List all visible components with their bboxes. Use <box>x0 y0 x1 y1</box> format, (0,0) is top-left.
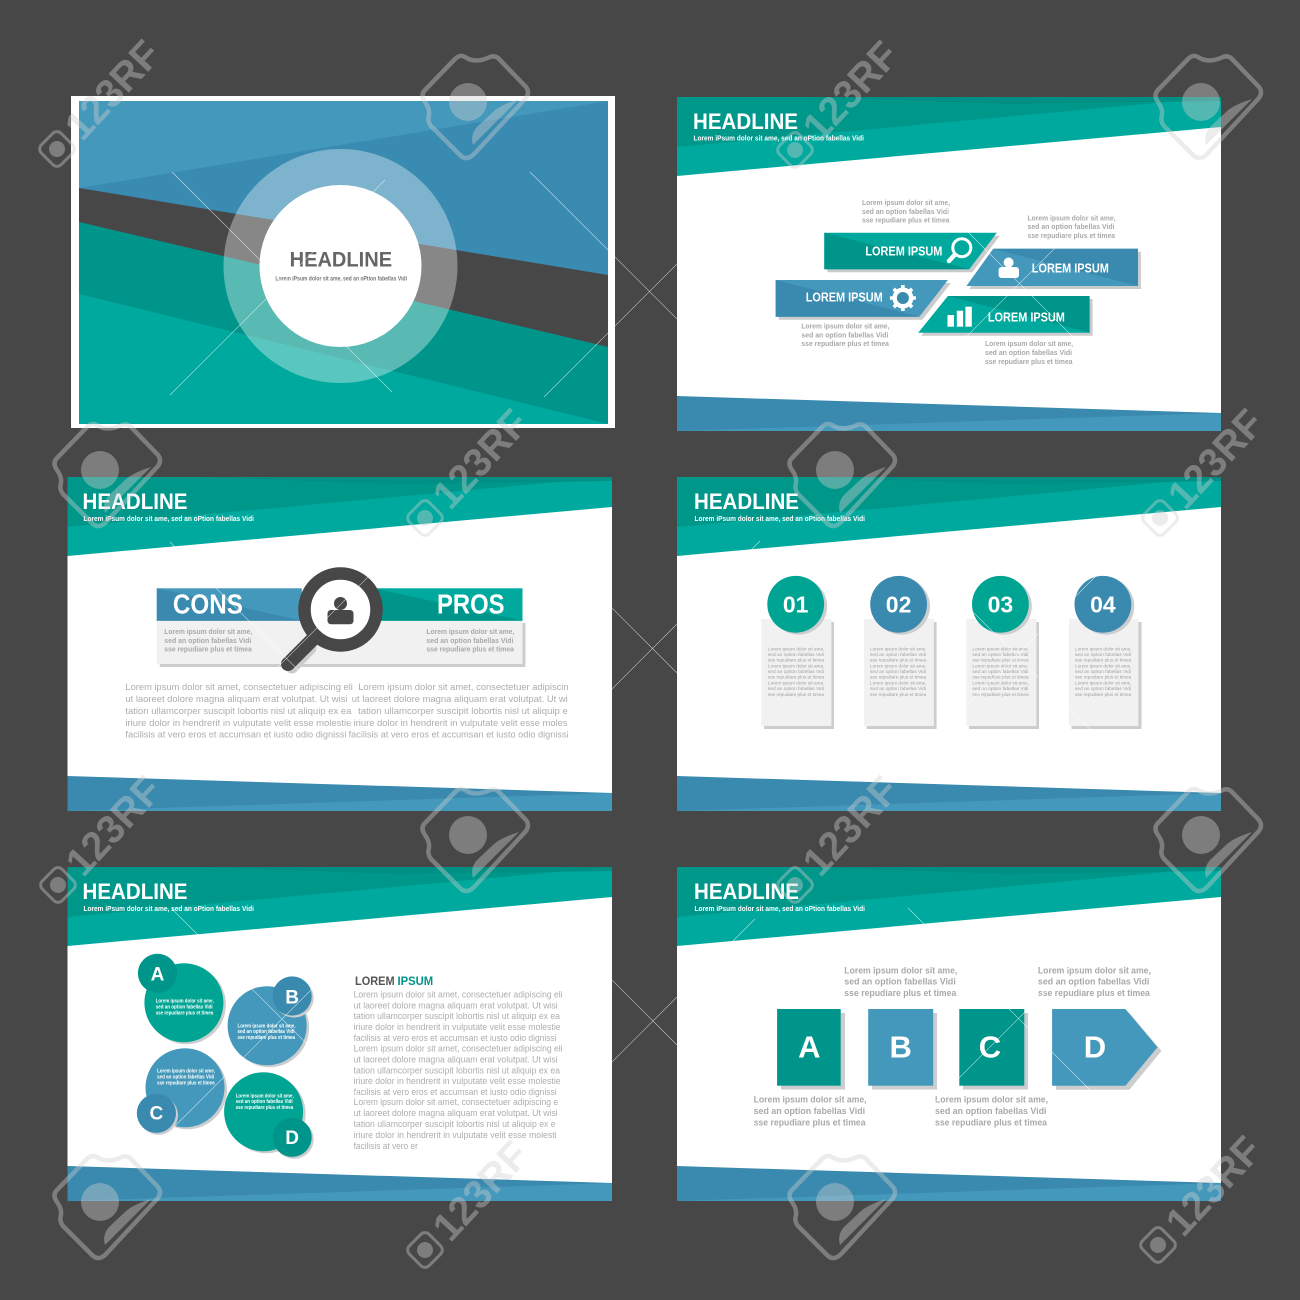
cover headline: HEADLINE <box>290 249 392 272</box>
card 01: sed an option fabellas Vidi <box>768 669 824 674</box>
text block: two column lorem: ut laoreet dolore magna aliquam erat volutpat. Ut wisi <box>125 694 347 705</box>
panel: slide 2 tabs: Lorem iPsum dolor sit ame, sed an oPtion fabellas Vidi <box>694 136 864 143</box>
card 02: Lorem ipsum dolor sit ame, <box>870 663 927 668</box>
text block: two column lorem: facilisis at vero eros et accumsan et iusto odio dignissi <box>125 730 346 741</box>
card 02: sed an option fabellas Vidi <box>870 669 926 674</box>
card 02: sse repudiare plus et timea <box>870 692 927 697</box>
card 01: sed an option fabellas Vidi <box>768 652 824 657</box>
text block: right paragraph: Lorem ipsum dolor sit amet, consectetuer adipiscing eli <box>354 1043 563 1054</box>
card 04: Lorem ipsum dolor sit ame, <box>1075 663 1132 668</box>
pros caption: sse repudiare plus et timea <box>426 647 514 654</box>
cons caption: sse repudiare plus et timea <box>164 647 252 654</box>
circle D: sse repudiare plus et timea <box>236 1105 294 1111</box>
subheading: lorem ipsum: IPSUM <box>398 974 433 988</box>
text block: right paragraph: ut laoreet dolore magna aliquam erat volutpat. Ut wisi <box>354 1054 558 1065</box>
caption: tab 3 <box>801 324 889 348</box>
text block: right paragraph: facilisis at vero eros et accumsan et iusto odio dignissi <box>354 1087 557 1098</box>
card 01: sse repudiare plus et timea <box>768 658 825 663</box>
watermark: 123RF text: 123RF <box>1160 401 1272 518</box>
icon: gear <box>890 285 916 311</box>
caption: top right <box>1038 965 1151 998</box>
text block: right paragraph: ut laoreet dolore magna aliquam erat volutpat. Ut wisi <box>354 1108 558 1119</box>
text block: right paragraph: facilisis at vero er <box>354 1141 418 1152</box>
caption: tab 4: sse repudiare plus et timea <box>985 359 1073 366</box>
caption: bottom middle: sse repudiare plus et timea <box>935 1117 1048 1127</box>
pros caption: Lorem ipsum dolor sit ame, <box>426 629 514 636</box>
caption: bottom left: sse repudiare plus et timea <box>754 1117 867 1127</box>
card 03: sse repudiare plus et timea <box>972 692 1029 697</box>
text block: right paragraph: iriure dolor in hendrerit in vulputate velit esse molestie <box>354 1022 561 1033</box>
text block: right paragraph: iriure dolor in hendrerit in vulputate velit esse molestie <box>354 1076 561 1087</box>
card 03: sse repudiare plus et timea <box>972 658 1029 663</box>
card 04: Lorem ipsum dolor sit ame, <box>1075 646 1132 651</box>
tab: blue person <box>966 249 1141 289</box>
circle B: Lorem ipsum dolor sit ame, <box>238 1023 296 1029</box>
step A <box>777 1009 845 1090</box>
watermark: 123RF text: 123RF <box>425 1133 537 1250</box>
panel: slide 6 process: HEADLINE <box>694 879 799 904</box>
card 04: sse repudiare plus et timea <box>1075 692 1132 697</box>
text block: right paragraph: facilisis at vero eros et accumsan et iusto odio dignissi <box>354 1033 557 1044</box>
circle A: A <box>151 965 165 986</box>
caption: tab 1: sse repudiare plus et timea <box>862 218 950 225</box>
circle D: Lorem ipsum dolor sit ame, <box>236 1093 294 1099</box>
card 03: sed an option fabellas Vidi <box>972 652 1028 657</box>
panel: slide 2 tabs <box>677 97 1221 431</box>
panel: slide 3 cons and pros <box>68 477 612 811</box>
circle B: sse repudiare plus et timea <box>238 1035 296 1041</box>
card 04: sed an option fabellas Vidi <box>1075 686 1131 691</box>
panel: slide 6 process: Lorem iPsum dolor sit ame, sed an oPtion fabellas Vidi <box>694 906 865 913</box>
card 01: sse repudiare plus et timea <box>768 692 825 697</box>
text block: two column lorem: iriure dolor in hendrerit in vulputate velit esse molestie <box>125 718 351 729</box>
text block: two column lorem: facilisis at vero eros et accumsan et iusto odio dignissi <box>349 730 569 741</box>
card 03: 03 <box>988 592 1013 618</box>
text block: two column lorem: ut laoreet dolore magna aliquam erat volutpat. Ut wi <box>352 694 568 705</box>
caption: bottom middle: sed an option fabellas Vidi <box>935 1106 1046 1116</box>
circle C: sed an option fabellas Vidi <box>157 1074 214 1080</box>
cons and pros card <box>157 588 526 667</box>
pros caption <box>426 629 514 654</box>
caption: bottom middle <box>935 1095 1048 1127</box>
card 03: sse repudiare plus et timea <box>972 675 1029 680</box>
card 01: Lorem ipsum dolor sit ame, <box>768 646 824 651</box>
text block: right paragraph: tation ullamcorper suscipit lobortis nisl ut aliquip ex ea <box>354 1011 561 1022</box>
step C <box>959 1009 1028 1090</box>
cons caption <box>164 629 252 654</box>
caption: top left: sed an option fabellas Vidi <box>844 977 956 987</box>
card 02: Lorem ipsum dolor sit ame, <box>870 680 927 685</box>
text block: two column lorem: tation ullamcorper suscipit lobortis nisl ut aliquip ex ea <box>125 706 352 717</box>
card 02: 02 <box>886 592 911 618</box>
tab: teal magnifier: LOREM IPSUM <box>865 245 942 259</box>
card 02: sse repudiare plus et timea <box>870 658 927 663</box>
card 03: sed an option fabellas Vidi <box>972 686 1028 691</box>
circle A <box>138 954 226 1044</box>
caption: tab 1: Lorem ipsum dolor sit ame, <box>862 200 950 207</box>
caption: top left <box>844 965 957 998</box>
text block: right paragraph <box>354 989 563 1152</box>
card 02: sed an option fabellas Vidi <box>870 652 926 657</box>
watermark: 123RF text: 123RF <box>795 768 907 885</box>
text block: two column lorem: Lorem ipsum dolor sit amet, consectetuer adipiscing eli <box>125 682 353 693</box>
tab: teal chart: LOREM IPSUM <box>988 311 1065 325</box>
tab: teal magnifier <box>824 233 1000 272</box>
circle C: C <box>150 1103 164 1124</box>
caption: bottom middle: Lorem ipsum dolor sit ame, <box>935 1095 1048 1105</box>
card 01: sse repudiare plus et timea <box>768 675 825 680</box>
panel: slide 2 tabs: HEADLINE <box>693 109 798 134</box>
panel: slide 5 circles: HEADLINE <box>82 879 188 904</box>
circle B: sed an option fabellas Vidi <box>238 1029 295 1035</box>
caption: top right: sse repudiare plus et timea <box>1038 988 1151 998</box>
card 03: sed an option fabellas Vidi <box>972 669 1028 674</box>
pros label: PROS <box>437 588 504 619</box>
watermark: 123RF text: 123RF <box>58 768 170 885</box>
card 04: sse repudiare plus et timea <box>1075 675 1132 680</box>
circle D: sed an option fabellas Vidi <box>236 1099 293 1105</box>
caption: tab 2: sed an option fabellas Vidi <box>1028 224 1115 231</box>
card 04: Lorem ipsum dolor sit ame, <box>1075 680 1132 685</box>
panel: slide 5 circles <box>68 867 612 1201</box>
text block: right paragraph: iriure dolor in hendrerit in vulputate velit esse molesti <box>354 1130 557 1141</box>
step A: A <box>798 1029 820 1064</box>
subheading: lorem ipsum <box>355 974 433 988</box>
caption: tab 4 <box>985 341 1073 366</box>
panel: slide 4 numbered cards <box>677 477 1221 811</box>
card 01: sed an option fabellas Vidi <box>768 686 824 691</box>
tab: blue gear <box>776 280 951 320</box>
card 04: sed an option fabellas Vidi <box>1075 652 1131 657</box>
circle C <box>137 1048 227 1135</box>
caption: top left: sse repudiare plus et timea <box>844 988 957 998</box>
watermark: 123RF text: 123RF <box>425 401 537 518</box>
caption: tab 3: sed an option fabellas Vidi <box>801 332 888 340</box>
card 02 <box>864 576 937 729</box>
step D arrow: D <box>1084 1029 1106 1064</box>
watermark: 123RF text: 123RF <box>795 33 907 150</box>
card 03: Lorem ipsum dolor sit ame, <box>972 646 1029 651</box>
caption: tab 3: sse repudiare plus et timea <box>801 341 889 348</box>
text block: two column lorem: tation ullamcorper suscipit lobortis nisl ut aliquip e <box>358 706 568 717</box>
icon: magnifier <box>949 239 971 261</box>
card 04: sed an option fabellas Vidi <box>1075 669 1131 674</box>
card 02: Lorem ipsum dolor sit ame, <box>870 646 927 651</box>
card 02: sse repudiare plus et timea <box>870 675 927 680</box>
cover subtitle: Lorem iPsum dolor sit ame, sed an oPtion fabellas Vidi <box>275 277 407 283</box>
circle A: Lorem ipsum dolor sit ame, <box>156 999 214 1005</box>
card 01: Lorem ipsum dolor sit ame, <box>768 680 824 685</box>
panel: slide 6 process <box>677 867 1221 1201</box>
circle C: sse repudiare plus et timea <box>157 1080 215 1086</box>
card 01 <box>761 576 834 729</box>
caption: top right: sed an option fabellas Vidi <box>1038 977 1149 987</box>
card 01: Lorem ipsum dolor sit ame, <box>768 663 824 668</box>
caption: bottom left <box>754 1095 867 1127</box>
text block: right paragraph: Lorem ipsum dolor sit amet, consectetuer adipiscing e <box>354 1097 558 1108</box>
icon: bar chart <box>948 307 972 327</box>
panel: slide 3 cons and pros: HEADLINE <box>82 489 188 514</box>
watermark: 123RF text: 123RF <box>1158 1128 1270 1245</box>
circle D: D <box>285 1128 299 1149</box>
text block: right paragraph: tation ullamcorper suscipit lobortis nisl ut aliquip ex e <box>354 1119 556 1130</box>
cons label: CONS <box>173 588 243 619</box>
caption: tab 2 <box>1028 215 1116 240</box>
text block: right paragraph: tation ullamcorper suscipit lobortis nisl ut aliquip ex ea <box>354 1065 561 1076</box>
text block: right paragraph: ut laoreet dolore magna aliquam erat volutpat. Ut wisi <box>354 1000 558 1011</box>
circle A: sed an option fabellas Vidi <box>156 1004 213 1010</box>
card 03: Lorem ipsum dolor sit ame, <box>972 680 1029 685</box>
caption: bottom left: Lorem ipsum dolor sit ame, <box>754 1095 867 1105</box>
watermark: 123RF text: 123RF <box>57 32 169 149</box>
text block: two column lorem <box>125 682 569 741</box>
tab: blue person: LOREM IPSUM <box>1032 262 1109 276</box>
icon: magnifier with person <box>288 574 376 667</box>
circle C: Lorem ipsum dolor sit ame, <box>157 1069 215 1075</box>
caption: tab 2: Lorem ipsum dolor sit ame, <box>1028 215 1116 222</box>
card 03: Lorem ipsum dolor sit ame, <box>972 663 1029 668</box>
card 04: sse repudiare plus et timea <box>1075 658 1132 663</box>
tab: blue gear: LOREM IPSUM <box>806 291 883 305</box>
circle D <box>224 1072 314 1159</box>
pros caption: sed an option fabellas Vidi <box>426 638 513 645</box>
caption: tab 1: sed an option fabellas Vidi <box>862 209 949 216</box>
caption: tab 1 <box>862 200 950 225</box>
text block: two column lorem: Lorem ipsum dolor sit amet, consectetuer adipiscin <box>358 682 569 693</box>
circle A: sse repudiare plus et timea <box>156 1010 214 1016</box>
card 02: sed an option fabellas Vidi <box>870 686 926 691</box>
caption: bottom left: sed an option fabellas Vidi <box>754 1106 865 1116</box>
step B <box>868 1009 937 1090</box>
circle B <box>228 976 314 1067</box>
subheading: lorem ipsum: LOREM <box>355 974 395 988</box>
step B: B <box>890 1029 912 1064</box>
step D arrow <box>1052 1009 1162 1090</box>
panel: slide 3 cons and pros: Lorem iPsum dolor sit ame, sed an oPtion fabellas Vidi <box>84 516 254 523</box>
circle B: B <box>285 987 299 1008</box>
panel: slide 5 circles: Lorem iPsum dolor sit ame, sed an oPtion fabellas Vidi <box>84 906 254 913</box>
caption: tab 3: Lorem ipsum dolor sit ame, <box>801 324 889 331</box>
card 01: 01 <box>783 592 809 618</box>
panel: slide 4 numbered cards: HEADLINE <box>694 489 799 514</box>
caption: tab 4: Lorem ipsum dolor sit ame, <box>985 341 1073 348</box>
caption: top left: Lorem ipsum dolor sit ame, <box>844 965 957 975</box>
text block: right paragraph: Lorem ipsum dolor sit amet, consectetuer adipiscing eli <box>354 989 563 1000</box>
cons caption: Lorem ipsum dolor sit ame, <box>164 629 252 636</box>
panel: slide 4 numbered cards: Lorem iPsum dolor sit ame, sed an oPtion fabellas Vidi <box>694 516 865 523</box>
panel: cover slide <box>71 96 615 428</box>
cons caption: sed an option fabellas Vidi <box>164 638 251 645</box>
caption: tab 4: sed an option fabellas Vidi <box>985 350 1072 357</box>
caption: top right: Lorem ipsum dolor sit ame, <box>1038 965 1151 975</box>
tab: teal chart <box>918 296 1093 336</box>
text block: two column lorem: iriure dolor in hendrerit in vulputate velit esse moles <box>354 718 568 729</box>
card 03 <box>966 576 1039 729</box>
caption: tab 2: sse repudiare plus et timea <box>1028 233 1115 240</box>
card 04: 04 <box>1090 592 1116 618</box>
step C: C <box>979 1029 1001 1064</box>
icon: person <box>999 258 1019 278</box>
card 04 <box>1069 576 1142 729</box>
